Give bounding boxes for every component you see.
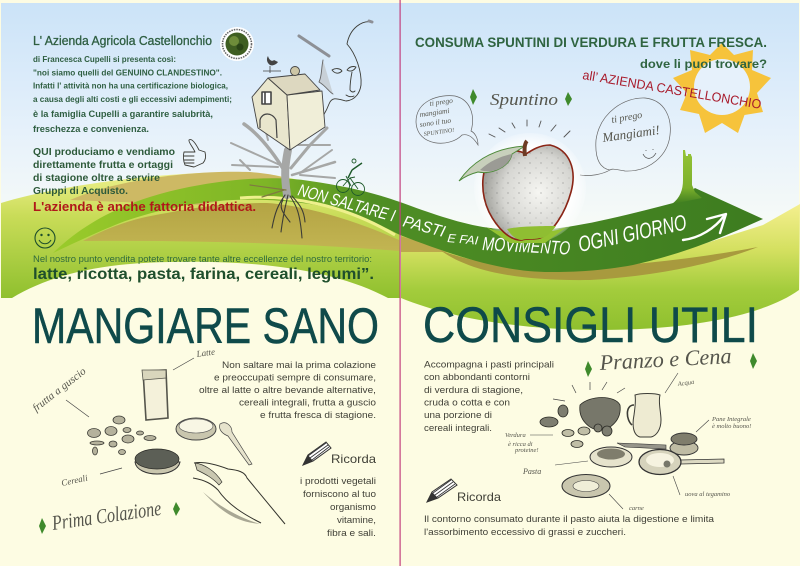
apple body	[483, 145, 573, 240]
hand labels: Verdura	[505, 432, 526, 439]
icon: pencil left	[303, 442, 331, 465]
icon: leaf marker	[565, 92, 572, 106]
landscape hills	[1, 172, 800, 330]
icon: leaf marker	[585, 361, 592, 377]
hand labels: Cereali	[60, 473, 89, 488]
icon: leaf marker	[173, 502, 180, 516]
hand labels: uova al tegamino	[685, 491, 731, 498]
text: reminder right	[424, 514, 715, 538]
icon: thumbs up	[183, 140, 206, 167]
illustration: breakfast	[30, 347, 285, 524]
bright yellow edge	[240, 197, 395, 235]
sun center	[694, 59, 750, 115]
leaf underside	[480, 154, 512, 171]
stem	[525, 141, 527, 156]
band slogan: E FAI	[447, 231, 480, 248]
heading: mangiare sano: MANGIARE SANO	[32, 298, 379, 354]
icon: leaf marker	[39, 518, 46, 534]
hand labels: carne	[629, 505, 644, 512]
label: pranzo e cena: Pranzo e Cena	[598, 343, 732, 375]
intro paragraph: "noi siamo quelli del GENUINO CLANDESTINO".	[33, 68, 222, 78]
intro paragraph: Infatti l' attività non ha una certificazione biologica,	[33, 80, 228, 90]
carton top	[142, 370, 166, 380]
text: meals advice: cruda o cotta e con	[424, 398, 510, 408]
text: breakfast advice: e frutta fresca di stagione.	[260, 410, 376, 421]
apple illustration	[459, 120, 586, 243]
band slogan: MOVIMENTO	[482, 234, 571, 260]
milk in bowl	[179, 419, 213, 433]
left hill	[1, 172, 400, 298]
speech bubble: right: Mangiami!	[600, 122, 661, 145]
text: breakfast advice: cereali integrali, frutta a guscio	[239, 398, 376, 408]
label: spuntino: Spuntino	[490, 90, 558, 109]
cream hill	[12, 262, 388, 298]
cereal bowl	[135, 462, 180, 474]
intro paragraph	[33, 54, 232, 135]
tan hill top	[70, 172, 300, 205]
hand labels: proteine!	[514, 447, 539, 454]
text: breakfast advice	[199, 360, 376, 421]
weathervane	[263, 56, 281, 73]
center fold line	[400, 0, 401, 566]
hand labels: Latte	[195, 347, 216, 359]
jug	[627, 394, 661, 437]
intro paragraph: a causa degli alti costi e gli eccessivi adempimenti;	[33, 94, 232, 104]
band slogan: PASTI	[401, 213, 447, 241]
house	[252, 66, 325, 150]
speech bubble: right	[580, 98, 670, 176]
leaf	[459, 146, 525, 181]
band slogan: OGNI GIORNO	[576, 210, 689, 257]
speech bubble: left: mangiami	[419, 106, 450, 119]
text: reminder right: Il contorno consumato durante il pasto aiuta la digestione e limita	[424, 514, 715, 525]
text: meals advice: Accompagna i pasti principali	[424, 360, 554, 370]
icon: pencil right	[427, 479, 457, 502]
production paragraph: di stagione oltre a servire	[33, 172, 160, 184]
speech bubble: left: sono il tuo	[419, 116, 452, 129]
sky	[1, 3, 799, 290]
right hill	[401, 204, 800, 330]
text: reminder left: vitamine,	[337, 515, 376, 526]
band slogan	[296, 181, 689, 260]
small smile	[643, 149, 656, 158]
speech bubble: right: ti prego	[611, 110, 643, 126]
cereal	[135, 449, 179, 469]
tan hill low	[83, 203, 399, 251]
castle tower	[672, 150, 702, 204]
text: breakfast advice: Non saltare mai la prima colazione	[222, 360, 376, 371]
hand labels	[30, 347, 216, 488]
icon: leaf marker	[470, 89, 477, 105]
tree trunk and branches	[231, 105, 335, 197]
heading: consuma: CONSUMA SPUNTINI DI VERDURA E FRUTTA FRESCA.	[415, 35, 767, 50]
label: ricorda left: Ricorda	[331, 452, 376, 466]
hand labels: è molto buono!	[712, 423, 751, 430]
answer: all’ AZIENDA CASTELLONCHIO	[582, 67, 762, 112]
speech bubble: left: ti prego	[429, 96, 454, 108]
text: breakfast advice: e preoccupati sempre di consumare,	[214, 372, 376, 384]
left olive strip	[401, 236, 450, 252]
text: breakfast advice: oltre al latte o altre bevande alternative,	[199, 385, 376, 396]
production paragraph	[33, 146, 175, 197]
illustration: tree house and face	[231, 21, 372, 238]
icon: smiley	[35, 228, 55, 248]
rays	[553, 382, 625, 401]
text: meals advice: una porzione di	[424, 410, 492, 421]
hand labels: frutta a guscio	[30, 365, 89, 414]
meat plate	[562, 474, 610, 498]
hand labels: Pane Integrale	[711, 416, 751, 423]
white halo	[474, 133, 586, 243]
icon: leaf marker	[750, 353, 757, 369]
milk carton	[143, 370, 168, 420]
roots	[272, 195, 305, 238]
green base	[486, 226, 568, 243]
intro paragraph: è la famiglia Cupelli a garantire salubrità,	[33, 109, 213, 120]
icon: cyclist	[336, 159, 364, 196]
question: dove li puoi trovare?	[640, 57, 767, 71]
text: reminder left: organismo	[330, 502, 376, 513]
text: meals advice: di verdura di stagione,	[424, 385, 523, 396]
olive shadow	[440, 247, 758, 280]
text: meals advice: cereali integrali.	[424, 423, 492, 434]
panel: left top text	[33, 34, 374, 283]
face	[299, 21, 372, 122]
annotation arrows	[66, 358, 194, 474]
band slogan: NON SALTARE I	[296, 181, 398, 226]
text: reminder left: fibra e sali.	[327, 528, 376, 539]
production paragraph: Gruppi di Acquisto.	[33, 185, 128, 197]
local products line: Nel nostro punto vendita potete trovare tante altre eccellenze del nostro territorio:	[33, 254, 372, 265]
hand	[193, 463, 285, 524]
icon: logo	[220, 27, 254, 61]
text: reminder left: forniscono al tuo	[303, 489, 376, 500]
speech bubble: left: SPUNTINO!	[423, 128, 455, 138]
white arrow	[683, 214, 726, 240]
apple stipple	[483, 145, 573, 240]
hand labels	[505, 379, 751, 512]
text: reminder left: i prodotti vegetali	[300, 476, 376, 487]
hand labels: Pasta	[522, 467, 541, 476]
heading: azienda: L' Azienda Agricola Castellonchio	[33, 34, 212, 48]
icon: sun	[673, 43, 771, 133]
intro paragraph: di Francesca Cupelli si presenta così:	[33, 54, 176, 64]
text: meals advice	[424, 360, 554, 434]
green bottom of apple	[507, 226, 556, 240]
pasta plate	[590, 447, 632, 467]
production paragraph: direttamente frutta e ortaggi	[33, 159, 173, 171]
products list: latte, ricotta, pasta, farina, cereali, legumi”.	[33, 266, 374, 283]
text: meals advice: con abbondanti contorni	[424, 372, 530, 383]
bowl	[176, 418, 216, 440]
nuts	[88, 416, 156, 455]
text: reminder right: l'assorbimento eccessivo di grassi e zuccheri.	[424, 527, 626, 538]
bread	[670, 433, 698, 455]
production paragraph: QUI produciamo e vendiamo	[33, 146, 175, 158]
illustration: lunch and dinner	[505, 373, 751, 512]
intro paragraph: freschezza e convenienza.	[33, 124, 149, 135]
egg pan	[639, 450, 724, 474]
annotation arrows	[530, 373, 709, 509]
spoon	[220, 423, 252, 465]
label: ricorda right: Ricorda	[457, 490, 501, 504]
heading: consigli utili: CONSIGLI UTILI	[423, 297, 758, 353]
red didactic farm line: L'azienda è anche fattoria didattica.	[33, 200, 256, 214]
vegetables	[540, 398, 620, 448]
shine rays	[489, 120, 570, 137]
hand labels: è ricca di	[508, 441, 533, 448]
label: prima colazione: Prima Colazione	[50, 496, 163, 535]
speech bubble: left	[416, 96, 478, 145]
hand labels: Acqua	[676, 379, 695, 388]
text: reminder left	[300, 476, 376, 539]
knife	[617, 443, 666, 449]
panel: snack heading	[415, 35, 767, 112]
swoosh band with tower	[53, 150, 763, 272]
